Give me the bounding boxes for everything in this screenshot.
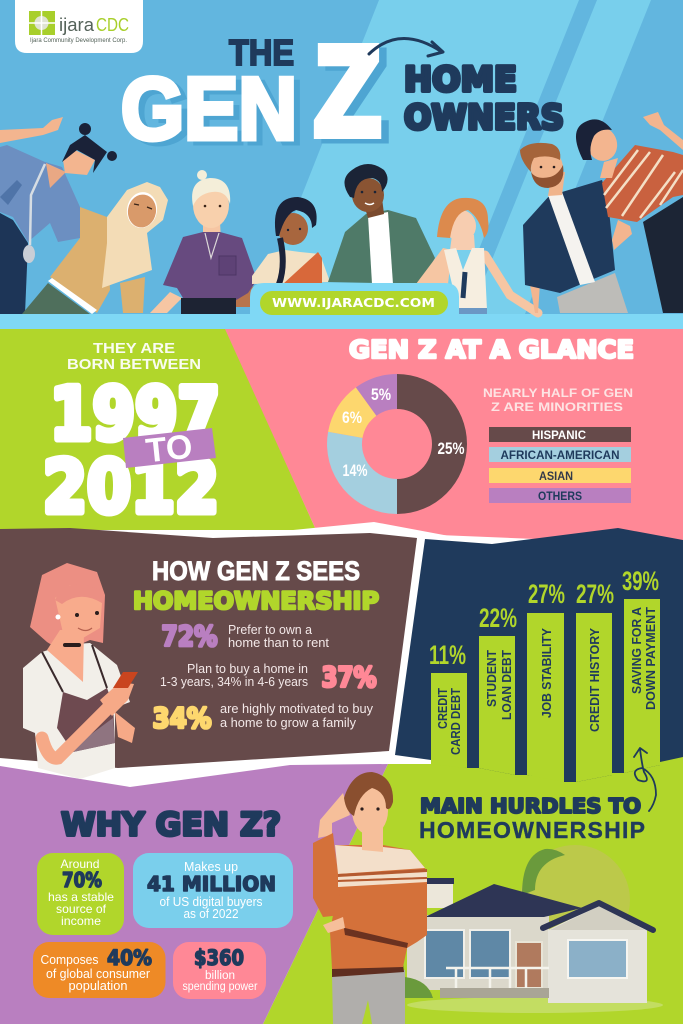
card: 70 percent income: 70% (62, 868, 102, 892)
card: 41 million buyers: Makes up (184, 860, 238, 874)
stat: 34 percent: are highly motivated to buy (220, 702, 374, 716)
years: 1997 to 2012: TO (144, 428, 194, 470)
title: The Gen Z Home Owners: THE (229, 32, 294, 73)
stat: 37 percent (160, 660, 376, 694)
card: 41 million buyers: 41 MILLION (147, 872, 276, 896)
heading: gen z at a glance: GEN Z AT A GLANCE (349, 335, 634, 364)
person: man in green jacket (328, 164, 435, 284)
illustration: thinking man (313, 772, 427, 1024)
stat: 34 percent (152, 702, 374, 734)
card: 40 percent consumers: population (68, 979, 128, 993)
legend: HISPANIC (532, 430, 586, 442)
logo (15, 0, 143, 53)
stat: 72 percent: home than to rent (228, 636, 330, 650)
bar: student loan debt: 22% (479, 603, 517, 633)
text: nearly half are minorities (483, 388, 633, 414)
legend: AFRICAN-AMERICAN (500, 450, 620, 462)
heading: why gen z: WHY GEN Z? (61, 806, 281, 844)
url tab (250, 283, 459, 315)
donut chart: 6% (342, 408, 362, 427)
title: The Gen Z Home Owners: GEN (127, 63, 303, 162)
card: 40 percent consumers: Composes (40, 953, 98, 967)
card: 70 percent income: source of (56, 902, 107, 916)
panel: lower right green background (263, 755, 683, 1024)
title: The Gen Z Home Owners (121, 20, 564, 166)
card: 360 billion spending: billion (205, 970, 235, 982)
title: The Gen Z Home Owners: OWNERS (404, 98, 564, 138)
card: 70 percent income (37, 853, 124, 935)
bar: job stability: 27% (528, 579, 565, 609)
card: 41 million buyers: as of 2022 (184, 907, 239, 921)
bar: credit card debt: CREDIT (436, 688, 450, 729)
stat: 37 percent: 37% (322, 660, 376, 694)
card: 70 percent income: income (61, 914, 101, 928)
person: woman in saree (252, 197, 330, 284)
card: 40 percent consumers: of global consumer (46, 967, 150, 981)
stat: 72 percent: 72% (162, 620, 218, 652)
card: 360 billion spending: $360 (194, 946, 244, 970)
bar: job stability (527, 579, 565, 782)
card: 360 billion spending (173, 942, 266, 999)
white divider band (0, 522, 492, 787)
title: The Gen Z Home Owners: Z (322, 25, 388, 166)
text: they are born between: BORN BETWEEN (67, 356, 201, 373)
donut chart: 5% (371, 385, 391, 404)
bar: credit card debt (429, 640, 467, 768)
bar: saving for a down payment: DOWN PAYMENT (644, 607, 658, 710)
bar: student loan debt: STUDENT (485, 650, 499, 707)
heading: how gen z sees: HOW GEN Z SEES (152, 556, 360, 586)
title: The Gen Z Home Owners: GEN (121, 59, 297, 158)
heading: main hurdles to homeownership: HOMEOWNERSHIP (419, 817, 645, 843)
illustration: group of young people (0, 112, 683, 314)
bar: saving for a down payment: SAVING FOR A (630, 607, 644, 694)
title: The Gen Z Home Owners: Z (314, 20, 380, 162)
bar: credit history: 27% (576, 579, 614, 609)
card: 70 percent income: has a stable (48, 890, 114, 904)
stat: 72 percent: Prefer to own a (228, 623, 312, 637)
text: nearly half are minorities: NEARLY HALF OF GEN (483, 388, 633, 400)
text: they are born between (67, 340, 201, 373)
logo: ijara (59, 15, 95, 35)
title: The Gen Z Home Owners: HOME (404, 60, 517, 100)
card: 41 million buyers: of US digital buyers (160, 895, 262, 909)
bar: job stability: JOB STABILITY (540, 627, 554, 718)
stat: 34 percent: a home to grow a family (220, 716, 357, 730)
bar: saving for a down payment: 39% (622, 566, 659, 596)
person: bearded man in navy jacket (520, 143, 628, 313)
illustration: woman with phone (23, 563, 138, 779)
bar: student loan debt: LOAN DEBT (500, 650, 514, 720)
years: 1997 to 2012 (43, 372, 220, 529)
donut chart: 25% (438, 439, 464, 458)
heading: main hurdles to homeownership (419, 794, 645, 843)
bar: credit history: CREDIT HISTORY (588, 627, 602, 732)
donut chart: 14% (342, 461, 368, 480)
arrow: title curve (369, 38, 443, 56)
heading: main hurdles to homeownership: MAIN HURDLES TO (420, 794, 641, 818)
card: 40 percent consumers: 40% (107, 946, 152, 970)
donut chart (327, 374, 467, 514)
panel: gen z at a glance background (225, 329, 683, 545)
panel: why gen z purple background (0, 758, 388, 1024)
legend: ASIAN (539, 471, 573, 483)
stat: 34 percent: 34% (152, 702, 212, 734)
card: 40 percent consumers (33, 942, 166, 998)
stat: 37 percent: Plan to buy a home in (187, 662, 308, 676)
person: woman in hijab (22, 182, 168, 314)
logo: CDC (96, 15, 129, 35)
card: 41 million buyers (133, 853, 293, 928)
stat: 72 percent (162, 620, 330, 652)
illustration: house (405, 845, 663, 1013)
card: 360 billion spending: spending power (182, 981, 258, 993)
card: 70 percent income: Around (60, 857, 100, 871)
years: 1997 to 2012: 1997 (50, 372, 220, 456)
bar chart: main hurdles (429, 566, 660, 782)
bar: credit history (576, 579, 614, 782)
person: red haired woman in white top (416, 198, 538, 314)
url tab: WWW.IJARACDC.COM (272, 295, 435, 310)
text: nearly half are minorities: Z ARE MINORITIES (491, 402, 623, 414)
text: they are born between: THEY ARE (93, 340, 175, 357)
person: man in striped shirt (576, 112, 683, 313)
arrow: curly up arrow (634, 748, 656, 811)
heading: homeownership: HOMEOWNERSHIP (133, 587, 379, 615)
panel: header background (0, 0, 683, 330)
logo: Ijara Community Development Corp. (30, 38, 127, 44)
panel: hurdles navy background (395, 528, 683, 782)
bar: student loan debt (479, 603, 517, 775)
panel: birth years background (0, 329, 316, 530)
bar: credit card debt: 11% (429, 640, 466, 670)
person: white haired person in purple (150, 170, 260, 314)
legend (489, 427, 631, 503)
person: woman with hair buns (0, 117, 117, 314)
bar: saving for a down payment (622, 566, 660, 773)
panel: how gen z sees homeownership (0, 528, 417, 768)
legend: OTHERS (538, 491, 582, 503)
stat: 37 percent: 1-3 years, 34% in 4-6 years (160, 675, 308, 689)
years: 1997 to 2012: 2012 (43, 445, 219, 529)
bar: credit card debt: CARD DEBT (449, 688, 463, 755)
